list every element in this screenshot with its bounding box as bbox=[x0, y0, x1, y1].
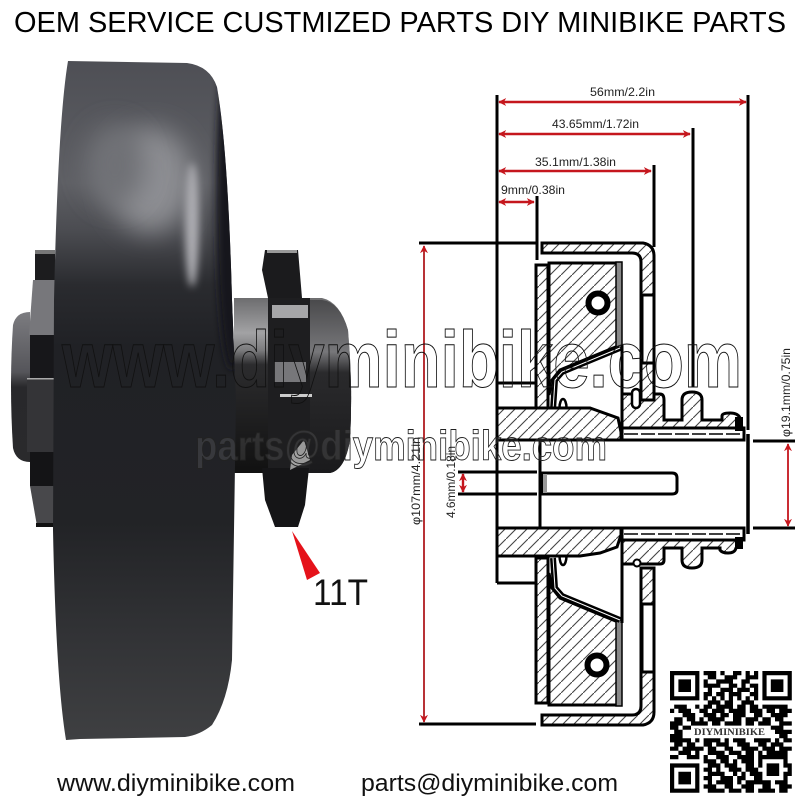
footer: website: www.diyminibike.com bbox=[56, 770, 295, 797]
dimension arrows bbox=[424, 102, 788, 722]
dimension labels: 35.1mm/1.38in bbox=[535, 155, 616, 169]
shaft bore and keyway bbox=[497, 434, 748, 534]
dimension labels: 43.65mm/1.72in bbox=[552, 117, 639, 131]
upper section of clutch bbox=[497, 243, 744, 440]
dimension labels: 56mm/2.2in bbox=[590, 85, 655, 99]
lower section of clutch bbox=[497, 528, 744, 725]
red pointer bbox=[292, 531, 320, 580]
QR code bbox=[670, 673, 792, 791]
product photo: clutch bbox=[11, 30, 351, 740]
extension lines bbox=[419, 95, 795, 724]
watermark: email: parts@diyminibike.com bbox=[195, 422, 607, 469]
footer: email: parts@diyminibike.com bbox=[361, 770, 618, 797]
title: OEM SERVICE CUSTMIZED PARTS DIY MINIBIKE PARTS bbox=[14, 7, 786, 39]
dimension labels: 9mm/0.38in bbox=[501, 183, 565, 197]
teeth count: 11T bbox=[313, 572, 368, 613]
technical section drawing bbox=[419, 95, 795, 725]
dimension labels: φ107mm/4.21in bbox=[409, 437, 423, 525]
callout: 11T sprocket bbox=[292, 531, 368, 613]
QR brand label: DIYMINIBIKE bbox=[694, 728, 765, 738]
dimension labels: 4.6mm/0.18in bbox=[444, 446, 458, 518]
sprocket and drum hub bbox=[234, 250, 351, 527]
dimension labels: φ19.1mm/0.75in bbox=[779, 348, 793, 437]
dimension labels bbox=[409, 85, 793, 525]
wheel drum bbox=[53, 61, 236, 740]
left hub and gear bbox=[11, 250, 55, 527]
